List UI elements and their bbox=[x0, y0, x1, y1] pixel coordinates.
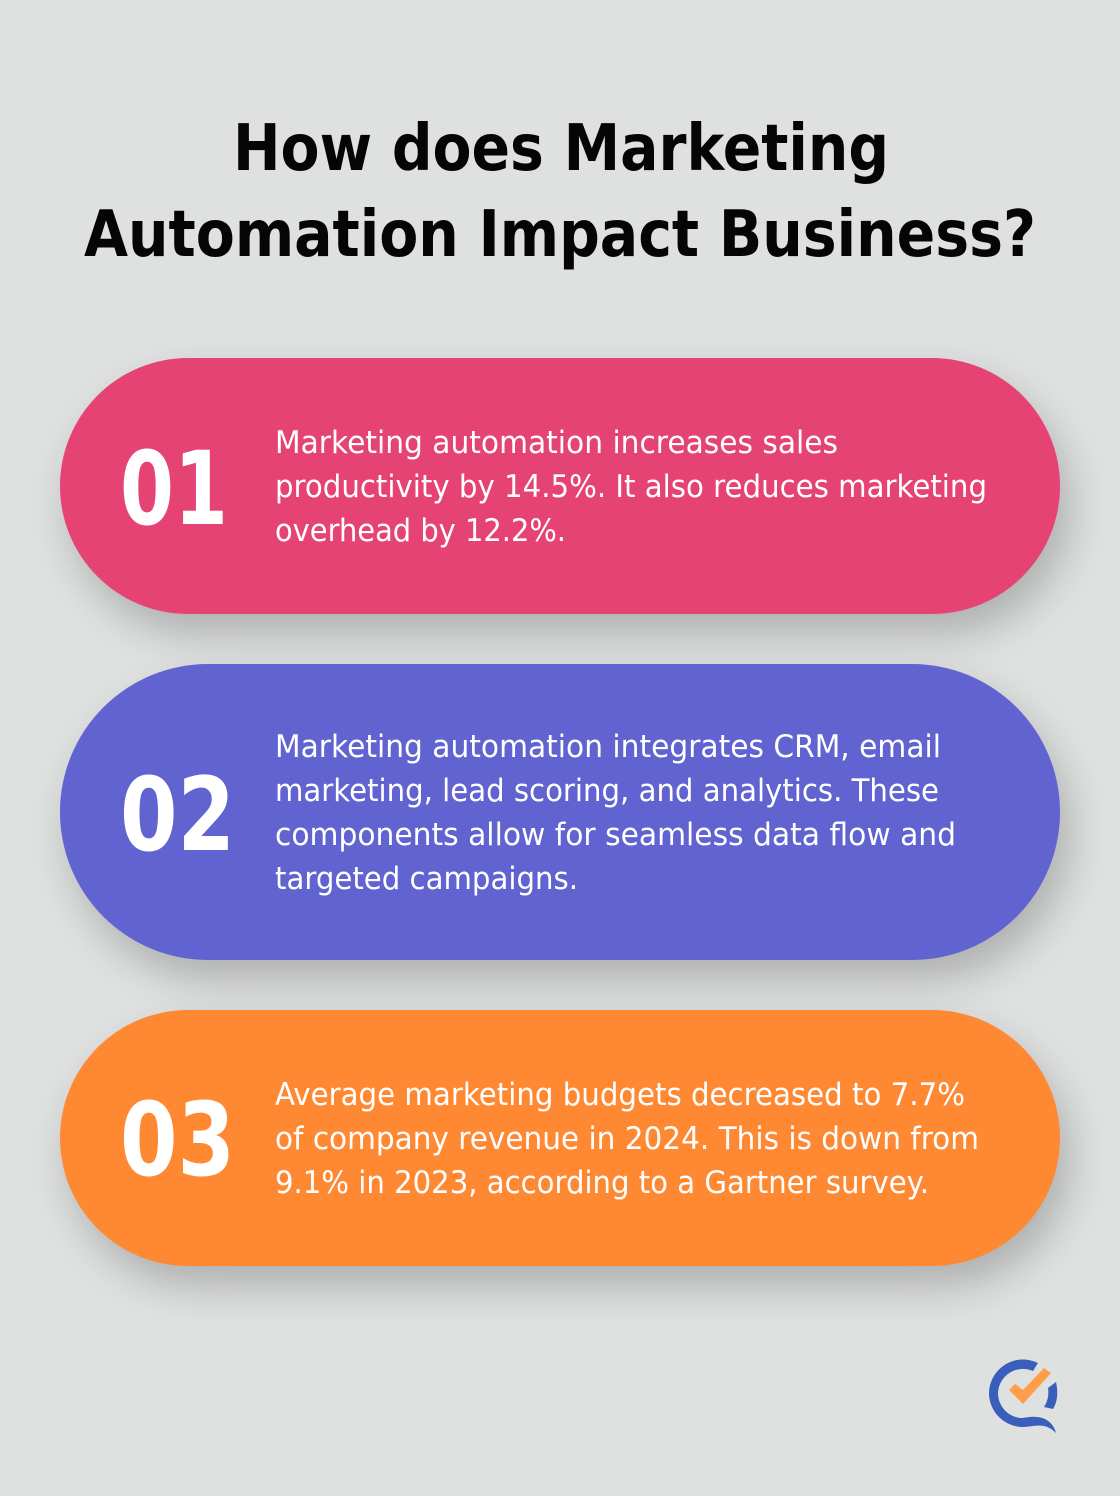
title bbox=[84, 112, 1036, 272]
number 01: 01 bbox=[120, 430, 228, 549]
card 03 text: of company revenue in 2024. This is down from bbox=[275, 1121, 979, 1157]
card 01 text: Marketing automation increases sales bbox=[275, 425, 838, 461]
card 03 text bbox=[275, 1077, 979, 1201]
card 02 text: Marketing automation integrates CRM, email bbox=[275, 729, 941, 765]
card 01 text: productivity by 14.5%. It also reduces marketing bbox=[275, 469, 987, 505]
card 02 text bbox=[275, 729, 956, 897]
card 03 text: 9.1% in 2023, according to a Gartner survey. bbox=[275, 1165, 929, 1201]
logo check mark bbox=[1009, 1368, 1051, 1404]
number 03: 03 bbox=[120, 1081, 235, 1200]
card 03 text: Average marketing budgets decreased to 7.7% bbox=[275, 1077, 965, 1113]
card 01 text bbox=[275, 425, 987, 549]
logo speech bubble bbox=[989, 1360, 1057, 1433]
card 01 text: overhead by 12.2%. bbox=[275, 513, 566, 549]
card 02 text: components allow for seamless data flow and bbox=[275, 817, 956, 853]
card 02 text: marketing, lead scoring, and analytics. These bbox=[275, 773, 939, 809]
panel: card 02 bbox=[60, 664, 1060, 960]
number 02: 02 bbox=[120, 756, 235, 875]
panel: card 03 bbox=[60, 1010, 1060, 1266]
title: How does Marketing bbox=[233, 112, 889, 186]
card 02 text: targeted campaigns. bbox=[275, 861, 578, 897]
icon: logo bbox=[989, 1360, 1058, 1433]
panel: card 01 bbox=[60, 358, 1060, 614]
